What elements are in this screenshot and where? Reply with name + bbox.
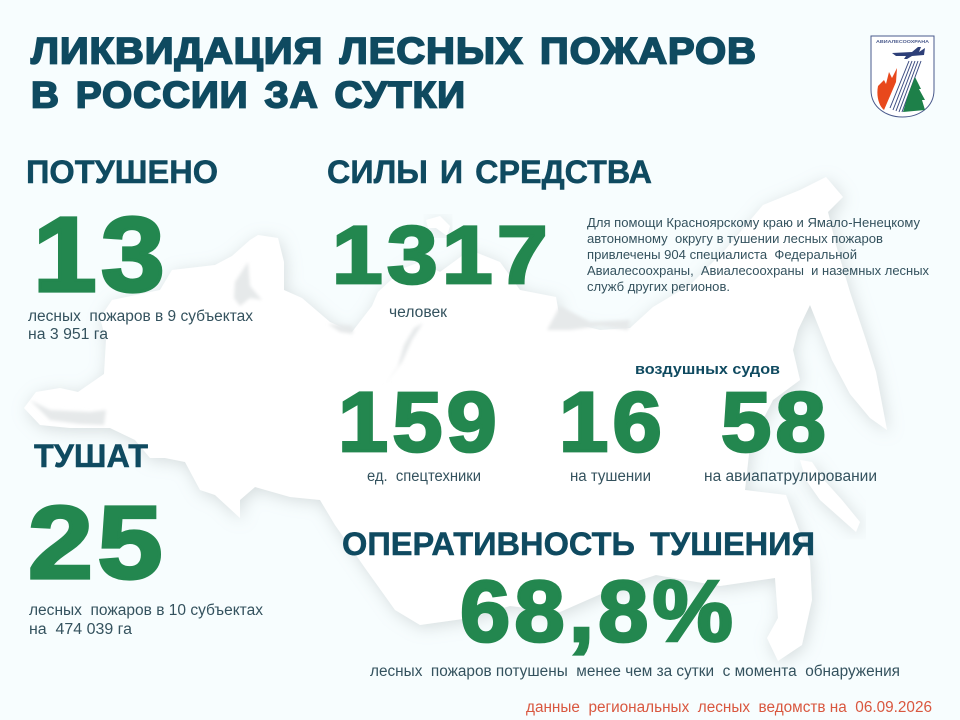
stat: 13: 13 [33, 196, 169, 314]
stat: 68,8%: 68,8% [460, 564, 737, 660]
title: В РОССИИ ЗА СУТКИ [31, 74, 466, 116]
heading: forces and means: СИЛЫ И СРЕДСТВА [327, 154, 652, 190]
caption: 13 fires [28, 308, 253, 343]
paragraph [587, 216, 930, 294]
caption: people: человек [389, 304, 447, 321]
caption: air patrol: на авиапатрулировании [704, 468, 877, 485]
heading: extinguished: ПОТУШЕНО [26, 154, 218, 190]
logo: Avialesookhrana shield [871, 36, 934, 117]
paragraph: служб других регионов. [587, 280, 730, 294]
caption: 25 fires: лесных пожаров в 10 субъектах [29, 602, 263, 619]
caption: 13 fires: на 3 951 га [28, 326, 108, 343]
icon: plane [892, 47, 925, 59]
caption: efficiency: лесных пожаров потушены менее чем за сутки с момента обнаружения [370, 663, 900, 680]
stat: 1317: 1317 [332, 210, 552, 301]
title [31, 30, 757, 116]
paragraph: автономному округу в тушении лесных пожаров [587, 232, 883, 246]
stat: 25: 25 [28, 485, 167, 600]
map of Russia [24, 177, 887, 661]
caption: 25 fires [29, 602, 263, 638]
paragraph: Для помощи Красноярскому краю и Ямало-Ненецкому [587, 216, 921, 230]
source note: данные региональных лесных ведомств на 06.09.2026 [526, 699, 932, 716]
caption: 13 fires: лесных пожаров в 9 субъектах [28, 308, 253, 325]
heading: being extinguished: ТУШАТ [34, 438, 148, 474]
stat: 16: 16 [559, 375, 666, 469]
heading: response efficiency: ОПЕРАТИВНОСТЬ ТУШЕНИЯ [342, 526, 815, 562]
logo: Avialesookhrana shield: АВИАЛЕСООХРАНА [876, 39, 930, 44]
title: ЛИКВИДАЦИЯ ЛЕСНЫХ ПОЖАРОВ [31, 30, 757, 72]
icon: fir tree [903, 77, 925, 112]
paragraph: привлечены 904 специалиста Федеральной [587, 248, 857, 262]
stat: 58: 58 [721, 375, 830, 469]
caption: 25 fires: на 474 039 га [29, 621, 132, 638]
island: Sakhalin [800, 460, 860, 532]
stat: 159: 159 [338, 375, 501, 469]
caption: firefighting: на тушении [570, 468, 651, 485]
label: aircraft: воздушных судов [635, 361, 780, 378]
icon: flame [877, 68, 897, 110]
island: Novaya Zemlya [426, 216, 450, 236]
paragraph: Авиалесоохраны, Авиалесоохраны и наземных лесных [587, 264, 930, 278]
icon: stripes [890, 61, 921, 112]
caption: vehicles: ед. спецтехники [367, 468, 481, 485]
inland seas [30, 262, 630, 425]
